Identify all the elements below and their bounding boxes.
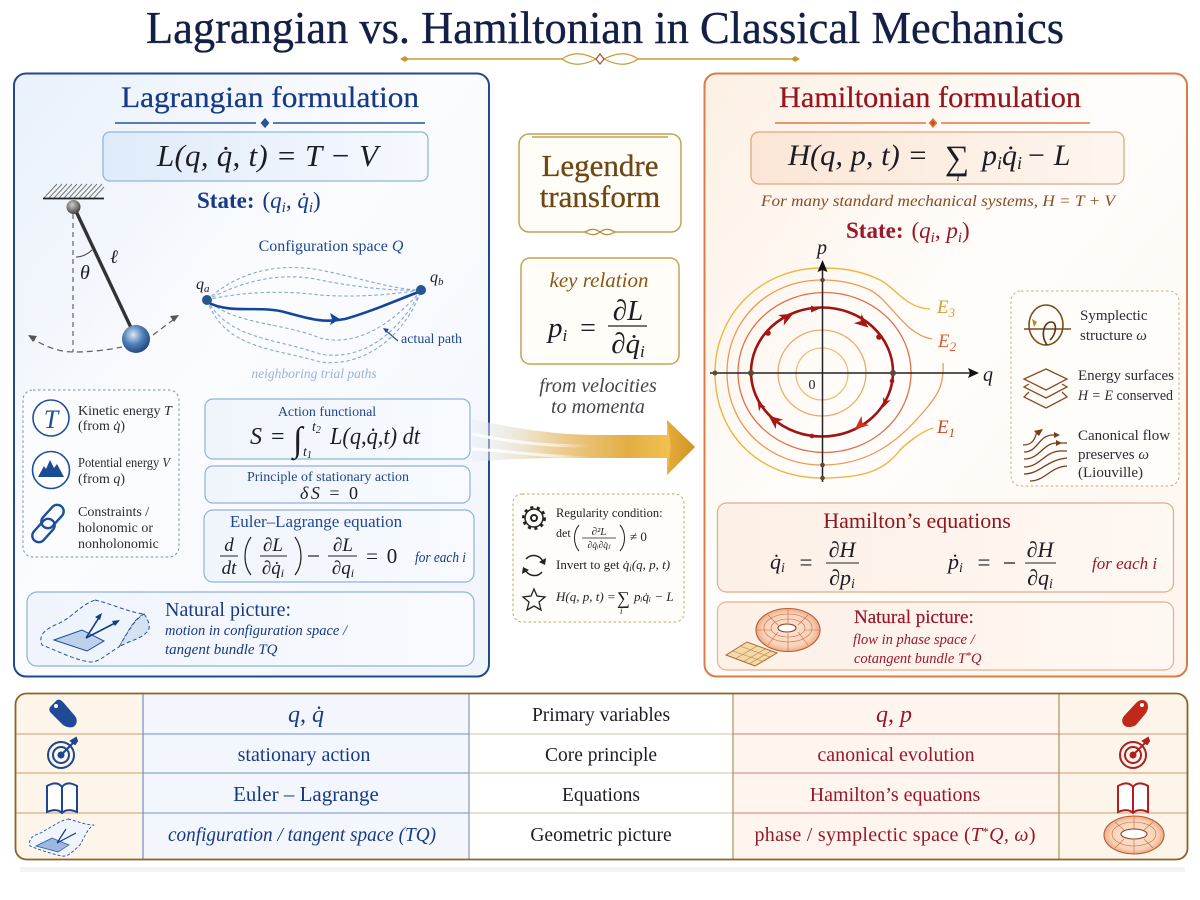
box: natural picture, cotangent bundle: flow in phase space / [853, 632, 977, 648]
box: action functional: L(q,q̇,t) dt [329, 424, 421, 450]
box: action functional [205, 399, 470, 461]
row 3: equations: Hamilton’s equations [810, 784, 980, 806]
regularity conditions box: ≠ 0 [630, 529, 647, 544]
box: Hamilton's equations: i [1049, 577, 1053, 592]
state label: q̇ [297, 188, 309, 213]
icon: phase-space patch [726, 642, 777, 666]
box: principle of stationary action: Principle of stationary action [247, 470, 409, 485]
icon: gear [524, 508, 544, 528]
key relation box: ∂L [613, 295, 643, 327]
formula: L = T - V: L(q, q̇, t) = T − V [156, 138, 381, 173]
regularity conditions box: Regularity condition: [556, 506, 663, 520]
box: Euler-Lagrange equation: ∂q [332, 558, 351, 579]
icon: kinetic energy T [33, 400, 69, 436]
icon: small manifold [29, 819, 94, 856]
text: constraints: holonomic or [78, 521, 153, 536]
box: Euler-Lagrange equation: i [351, 566, 354, 580]
icon: symplectic structure [1024, 305, 1071, 345]
box: Euler-Lagrange equation: 0 [387, 544, 397, 568]
configuration space diagram: b [438, 276, 444, 288]
pendulum diagram: θ [80, 262, 90, 284]
regularity conditions box: det [556, 526, 571, 540]
box: natural picture, cotangent bundle: cotangent bundle T [854, 651, 966, 667]
row 4: geometric picture: phase / symplectic space (T [754, 824, 982, 846]
box: action functional: = [271, 424, 285, 450]
text: potential energy: Potential energy V [78, 456, 171, 471]
formula: Hamiltonian definition: H(q, p, t) = [787, 139, 928, 172]
legend: geometric structure: (Liouville) [1078, 465, 1143, 481]
phase portrait: 2 [950, 339, 957, 354]
icon: kinetic energy T: T [44, 405, 60, 434]
regularity conditions box: i [629, 563, 632, 573]
box: Hamilton's equations: ∂p [829, 565, 851, 590]
panel: Hamiltonian formulation [704, 74, 1187, 676]
ornament [585, 229, 615, 235]
legend: geometric structure: H = E conserved [1078, 388, 1177, 404]
box: Hamilton's equations [718, 503, 1174, 592]
caption: from velocities to momenta: to momenta [551, 396, 645, 418]
icon: chain link [30, 502, 66, 545]
box: natural picture, cotangent bundle: Q [971, 651, 982, 667]
icon: canonical flow [1023, 429, 1067, 481]
icon: blue book [47, 783, 77, 813]
formula: Hamiltonian definition: q̇ [1002, 139, 1017, 172]
box: Euler-Lagrange equation: = [366, 544, 378, 568]
key relation box: = [580, 313, 596, 344]
icon: blue tag [49, 700, 77, 727]
icon: potential energy mountain [32, 452, 70, 488]
formula: Hamiltonian definition: p [982, 139, 997, 172]
icon: torus [756, 608, 820, 652]
box: action functional: ∫ [291, 420, 305, 461]
state label: , [935, 218, 946, 243]
icon: red book [1118, 783, 1148, 813]
heading: Hamiltonian formulation: Hamiltonian formulation [779, 81, 1081, 114]
text: potential energy: (from q) [78, 472, 125, 487]
legend: geometric structure [1011, 291, 1179, 486]
box: Euler-Lagrange equation: i [281, 566, 284, 580]
icon: small torus [1104, 816, 1164, 854]
icon: energy surfaces [1024, 369, 1067, 408]
box: Hamilton's equations: = [800, 550, 812, 575]
formula: Hamiltonian definition: ∑ [945, 140, 969, 177]
configuration space diagram [196, 238, 462, 381]
configuration space diagram: actual path [401, 332, 462, 347]
box: Hamilton's equations: i [851, 577, 855, 592]
formula: Hamiltonian definition: i [956, 170, 960, 184]
note: H = T + V: For many standard mechanical systems, H = T + V [760, 193, 1117, 210]
regularity conditions box: pᵢq̇ᵢ − L [633, 589, 674, 604]
legend: energies and constraints [23, 390, 179, 557]
box: principle of stationary action [205, 466, 470, 503]
phase portrait: E [938, 331, 950, 352]
state label: i [282, 200, 286, 216]
phase portrait: E [937, 297, 949, 318]
legend: geometric structure: Symplectic [1080, 308, 1148, 324]
key relation box: key relation [550, 268, 648, 292]
title: Lagrangian vs. Hamiltonian in Classical Mechanics [146, 2, 1064, 53]
box: natural picture, tangent bundle: Natural picture: [165, 599, 291, 621]
icon: invert arrows [522, 555, 546, 576]
row 2: core principle: Core principle [545, 745, 657, 766]
row 2: core principle: stationary action [238, 744, 370, 766]
configuration space diagram: neighboring trial paths [251, 366, 377, 381]
text: constraints: Constraints / [78, 505, 149, 520]
pendulum diagram [28, 184, 179, 353]
box: natural picture, tangent bundle: tangent bundle TQ [165, 642, 278, 658]
box: Euler-Lagrange equation: for each i [415, 550, 466, 566]
box: Euler-Lagrange equation: dt [222, 558, 237, 579]
legend: geometric structure: Energy surfaces [1078, 368, 1174, 384]
row 1: primary variables: q, q̇ [288, 702, 324, 728]
box: Euler-Lagrange equation [204, 510, 474, 582]
row 2: core principle: canonical evolution [817, 744, 975, 766]
state label: p [944, 218, 958, 243]
text: constraints: nonholonomic [78, 537, 159, 552]
regularity conditions box: ∑ [617, 588, 630, 608]
key relation box: ∂q̇ [611, 328, 640, 360]
caption: from velocities to momenta: from velocities [539, 375, 657, 397]
box: Euler-Lagrange equation: d [224, 535, 234, 556]
heading divider [115, 119, 425, 127]
box: Hamilton's equations: ṗ [948, 549, 959, 574]
box: action functional: t [312, 420, 316, 435]
phase portrait: 3 [948, 305, 956, 320]
regularity conditions box [513, 494, 684, 622]
legendre transform title box [519, 134, 681, 235]
transform arrow [472, 419, 695, 475]
row 4: geometric picture: configuration / tangent space (TQ) [168, 824, 436, 846]
state label: ) [313, 188, 321, 213]
formula: Hamiltonian definition: − L [1026, 139, 1070, 172]
box: natural picture, cotangent bundle: * [966, 651, 971, 662]
box: Hamilton's equations: i [781, 561, 785, 576]
legend: geometric structure: preserves ω [1078, 447, 1149, 463]
heading divider [775, 119, 1090, 127]
configuration space diagram: Configuration space Q [259, 238, 404, 255]
regularity conditions box: ∂q̇ᵢ∂q̇ⱼ [588, 541, 611, 551]
row 1: primary variables [288, 702, 912, 728]
regularity conditions box: i [620, 606, 623, 616]
legendre transform title box: transform [540, 179, 660, 214]
phase portrait: q [983, 364, 993, 386]
box: principle of stationary action: δS = 0 [300, 483, 358, 503]
state label: State: (q [197, 188, 282, 213]
configuration space diagram: q [430, 269, 438, 286]
state label: i [958, 230, 962, 246]
key relation box [521, 258, 679, 364]
box: natural picture, tangent bundle: motion in configuration space / [165, 623, 349, 639]
phase portrait: 0 [808, 378, 816, 393]
key relation box: i [640, 342, 645, 361]
icon: blue target [48, 738, 77, 768]
regularity conditions box: Invert to get q̇ [556, 557, 629, 572]
state label: State: (q [846, 218, 931, 243]
box: action functional: S [250, 424, 262, 450]
box: Hamilton's equations: ∂q [1027, 565, 1049, 590]
box: natural picture, tangent bundle [27, 592, 474, 666]
text: kinetic energy: Kinetic energy T [78, 404, 172, 419]
phase portrait: p [815, 237, 827, 259]
state label: i [309, 200, 313, 216]
state label: ) [962, 218, 970, 243]
box: natural picture, cotangent bundle [718, 602, 1174, 670]
formula: Hamiltonian definition: i [1017, 153, 1022, 173]
row 2: core principle [238, 744, 975, 766]
box: Euler-Lagrange equation: ∂q̇ [262, 558, 281, 579]
regularity conditions box: ∂²L [592, 526, 606, 538]
text: kinetic energy: (from q̇) [78, 419, 125, 434]
regularity conditions box: H(q, p, t) = [555, 589, 616, 604]
row 1: primary variables: Primary variables [532, 705, 670, 726]
icon: star [523, 589, 545, 610]
configuration space diagram: a [204, 283, 210, 295]
row 4: geometric picture [168, 824, 1036, 846]
formula: Hamiltonian definition: i [997, 153, 1002, 173]
legendre transform title box: Legendre [541, 148, 659, 183]
row 3: equations [233, 782, 980, 806]
state label: , [286, 188, 297, 213]
box: Hamilton's equations: = [978, 550, 990, 575]
formula: Hamiltonian definition [751, 132, 1124, 184]
box: Euler-Lagrange equation: Euler–Lagrange equation [230, 512, 403, 531]
box: Hamilton's equations: ∂H [1027, 537, 1054, 562]
state label: i [931, 230, 935, 246]
box: natural picture, cotangent bundle: Natural picture: [854, 607, 974, 628]
configuration space diagram: q [196, 276, 204, 293]
icon: red tag [1122, 700, 1148, 727]
box: action functional: 1 [307, 450, 312, 461]
box: Hamilton's equations: Hamilton’s equations [823, 508, 1011, 533]
box: action functional: 2 [316, 425, 321, 436]
phase portrait [710, 237, 993, 482]
row 4: geometric picture: ) [1029, 824, 1036, 846]
row 3: equations: Equations [562, 785, 640, 806]
box: action functional: Action functional [278, 405, 376, 420]
flow arrows [754, 306, 894, 438]
phase portrait: 1 [949, 425, 955, 440]
box: Hamilton's equations: ∂H [829, 537, 856, 562]
key relation box: p [548, 312, 562, 344]
comparison table [15, 693, 1188, 860]
row 4: geometric picture: Q, ω [989, 824, 1029, 846]
legend: geometric structure: Canonical flow [1078, 428, 1170, 444]
box: Hamilton's equations: for each i [1092, 554, 1157, 573]
icon: tangent plane on manifold [41, 600, 149, 662]
key relation box: i [562, 326, 568, 345]
legend: geometric structure: structure ω [1080, 328, 1147, 344]
formula: L = T - V [103, 132, 428, 181]
row 3: equations: Euler – Lagrange [233, 782, 379, 806]
phase portrait: E [937, 417, 949, 438]
box: Hamilton's equations: q̇ [770, 549, 781, 574]
regularity conditions box: (q, p, t) [632, 557, 670, 572]
row 1: primary variables: q, p [876, 702, 912, 728]
box: Euler-Lagrange equation: ∂L [333, 535, 353, 556]
icon: red target [1120, 738, 1149, 768]
panel: Lagrangian formulation [14, 74, 489, 676]
box: Hamilton's equations: i [959, 561, 963, 576]
box: Euler-Lagrange equation: ∂L [263, 535, 283, 556]
row 4: geometric picture: Geometric picture [530, 825, 672, 846]
row 4: geometric picture: * [982, 824, 989, 839]
box: action functional: t [303, 445, 307, 460]
title ornament [400, 54, 800, 64]
pendulum diagram: ℓ [110, 247, 118, 268]
heading: Lagrangian formulation: Lagrangian formulation [121, 81, 419, 114]
